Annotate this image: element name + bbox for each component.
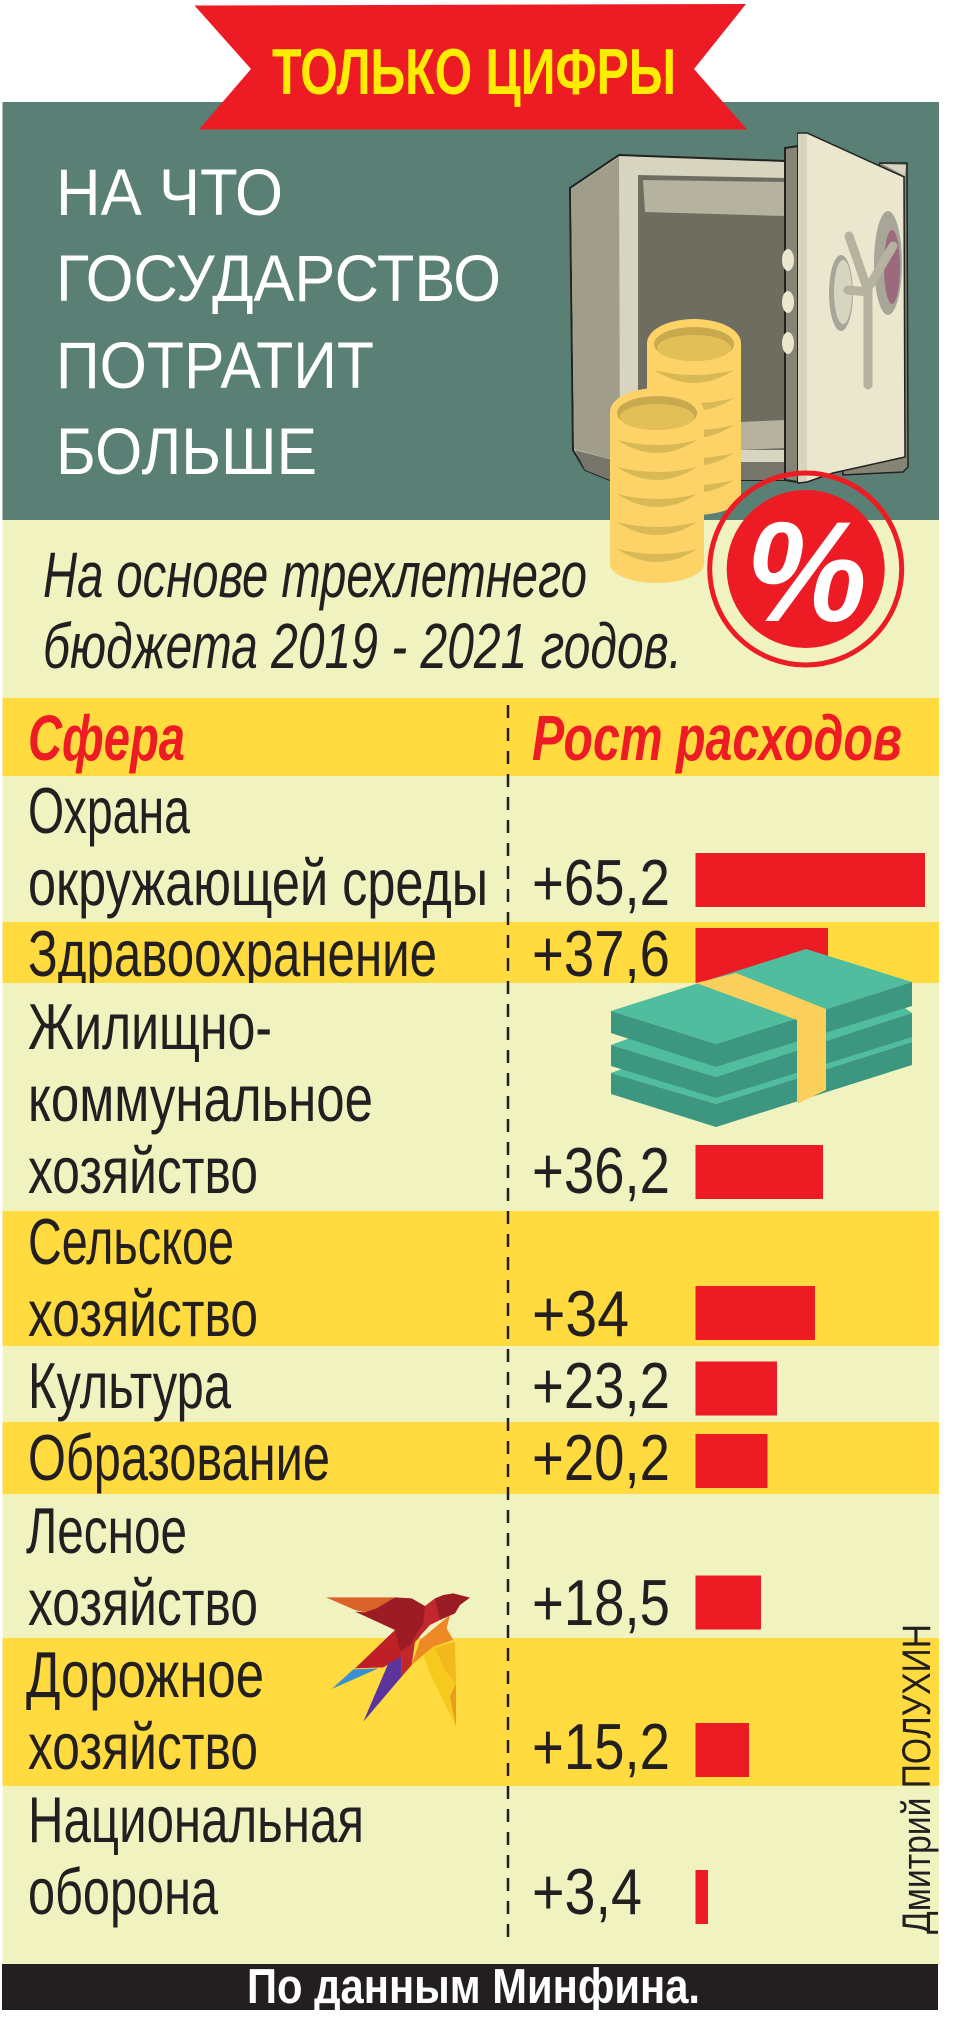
row: roads: хозяйство bbox=[28, 1710, 258, 1783]
icon: stack of banknotes bbox=[611, 949, 912, 1127]
intro text bbox=[43, 539, 682, 682]
row: culture bbox=[2, 1346, 939, 1422]
row: defence: +3,4 bbox=[532, 1855, 642, 1928]
title bbox=[56, 155, 501, 488]
title: БОЛЬШЕ bbox=[56, 414, 317, 488]
row: healthcare: Здравоохранение bbox=[28, 917, 437, 990]
row: roads: +15,2 bbox=[532, 1710, 670, 1783]
row: defence: оборона bbox=[28, 1855, 219, 1928]
row: culture: +23,2 bbox=[532, 1349, 670, 1422]
table header: Сфера bbox=[28, 702, 185, 774]
row: environment: окружающей среды bbox=[28, 846, 488, 919]
row: housing and utilities: +36,2 bbox=[532, 1134, 670, 1207]
source footer bbox=[2, 1960, 938, 2014]
row: forestry: хозяйство bbox=[28, 1566, 258, 1639]
row: education bbox=[2, 1421, 939, 1494]
intro text: бюджета 2019 - 2021 годов. bbox=[43, 610, 682, 682]
title: НА ЧТО bbox=[56, 155, 283, 229]
row: education: Образование bbox=[28, 1421, 330, 1494]
row: culture: Культура bbox=[28, 1349, 232, 1422]
row: environment bbox=[2, 774, 939, 922]
row: agriculture: хозяйство bbox=[28, 1277, 258, 1350]
row: roads bbox=[2, 1638, 939, 1786]
row: healthcare bbox=[2, 917, 939, 990]
row: healthcare: +37,6 bbox=[532, 917, 670, 990]
icon: swallow logo bbox=[326, 1593, 470, 1727]
row: environment: Охрана bbox=[28, 774, 191, 847]
row: housing and utilities: коммунальное bbox=[28, 1062, 373, 1135]
row: education: +20,2 bbox=[532, 1421, 670, 1494]
title: ПОТРАТИТ bbox=[56, 328, 374, 402]
intro text: На основе трехлетнего bbox=[43, 539, 587, 611]
table header bbox=[2, 698, 939, 776]
row: housing and utilities bbox=[2, 983, 939, 1211]
row: housing and utilities: Жилищно- bbox=[28, 990, 272, 1063]
banner: only numbers: ТОЛЬКО ЦИФРЫ bbox=[272, 35, 676, 108]
title: ГОСУДАРСТВО bbox=[56, 241, 501, 315]
row: forestry: +18,5 bbox=[532, 1566, 670, 1639]
row: forestry: Лесное bbox=[26, 1494, 187, 1567]
icon: back coin stack bbox=[647, 319, 741, 515]
banner: only numbers bbox=[194, 4, 747, 130]
row: agriculture: +34 bbox=[532, 1277, 629, 1350]
icon: percent badge: % bbox=[746, 493, 867, 652]
panel: teal title panel bbox=[2, 102, 939, 520]
row: agriculture bbox=[2, 1205, 939, 1350]
panel: cream intro panel bbox=[2, 520, 939, 698]
icon: front coin stack bbox=[610, 388, 704, 583]
source footer: По данным Минфина. bbox=[247, 1960, 700, 2014]
icon: percent badge bbox=[710, 473, 902, 665]
icon: open safe bbox=[570, 133, 908, 483]
row: roads: Дорожное bbox=[26, 1638, 264, 1711]
row: housing and utilities: хозяйство bbox=[28, 1134, 258, 1207]
row: forestry bbox=[2, 1494, 939, 1639]
row: defence: Национальная bbox=[28, 1783, 364, 1856]
author credit: Дмитрий ПОЛУХИН bbox=[895, 1624, 939, 1934]
row: defence bbox=[2, 1783, 939, 1964]
row: environment: +65,2 bbox=[532, 846, 670, 919]
row: agriculture: Сельское bbox=[28, 1205, 234, 1278]
